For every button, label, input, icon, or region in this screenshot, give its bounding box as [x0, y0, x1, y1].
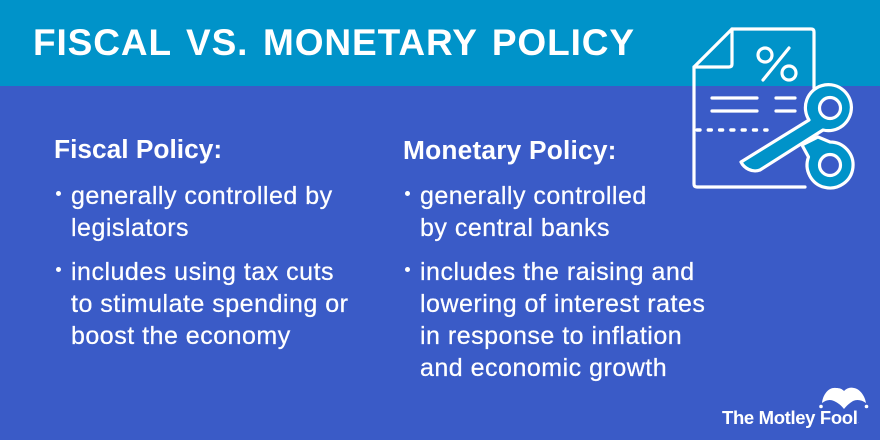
heading: fiscal policy: Fiscal Policy: — [54, 134, 222, 164]
bullet: tax cuts: boost the economy — [71, 322, 291, 350]
bullet: interest rates — [405, 258, 705, 382]
bullet: interest rates: includes the raising and — [420, 258, 695, 286]
bullet: interest rates: lowering of interest rates — [420, 290, 705, 318]
bullet: tax cuts — [56, 258, 348, 350]
heading: monetary policy: Monetary Policy: — [403, 135, 617, 165]
bullet: central banks: by central banks — [420, 214, 610, 242]
logo wordmark: The Motley Fool. — [722, 407, 858, 428]
header band — [0, 0, 880, 86]
bullet: legislators — [56, 182, 333, 242]
bullet: tax cuts: to stimulate spending or — [71, 290, 348, 318]
bullet: legislators: generally controlled by — [71, 182, 333, 210]
bullet: central banks: generally controlled — [420, 182, 647, 210]
panel: fiscal policy — [54, 134, 348, 350]
bullet: interest rates: and economic growth — [420, 354, 667, 382]
bullet: tax cuts: includes using tax cuts — [71, 258, 334, 286]
title: FISCAL VS. MONETARY POLICY — [33, 22, 635, 63]
icon: jester hat — [819, 388, 868, 409]
bullet: legislators: legislators — [71, 214, 189, 242]
logo: the motley fool — [722, 388, 868, 428]
panel: monetary policy — [403, 135, 705, 382]
bullet: central banks — [405, 182, 647, 242]
bullet: interest rates: in response to inflation — [420, 322, 682, 350]
icon: tax document with scissors — [692, 27, 855, 190]
